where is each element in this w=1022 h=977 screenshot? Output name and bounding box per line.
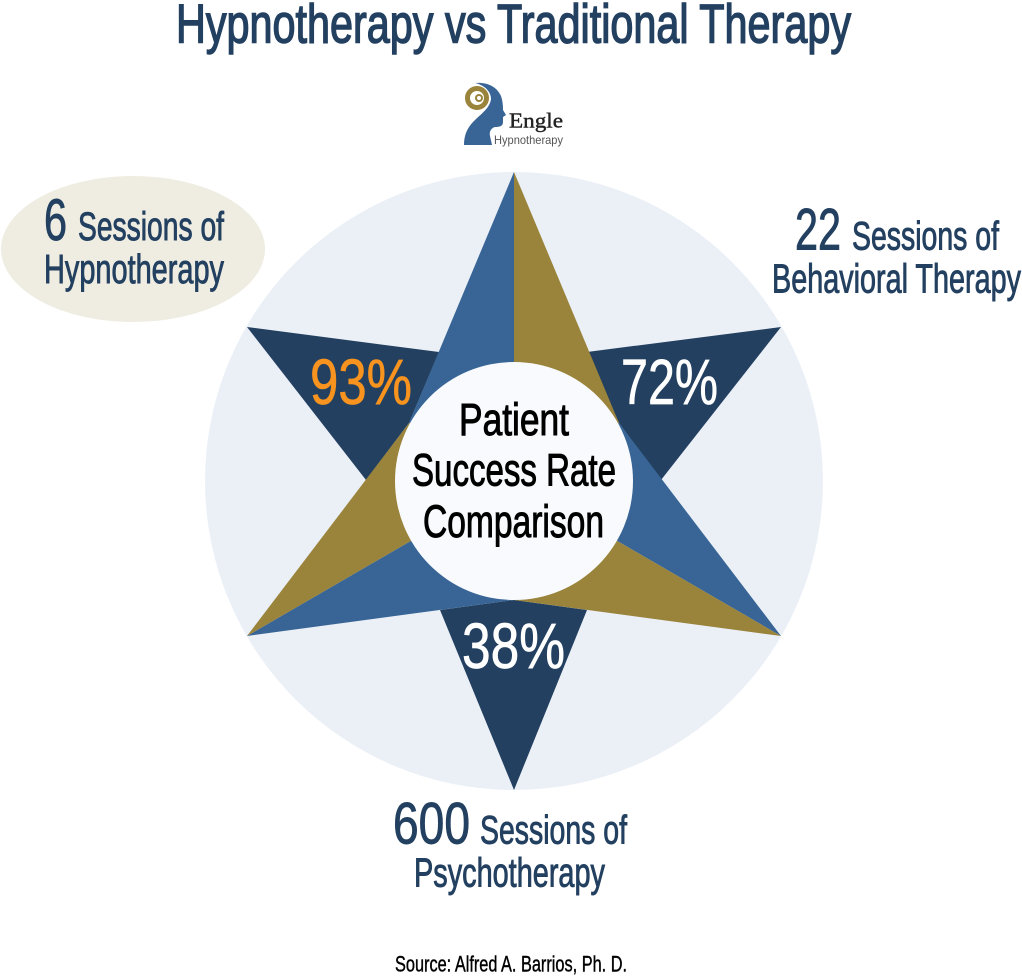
logo: Engle Hypnotherapy bbox=[464, 83, 563, 147]
stat: 93%: 93% bbox=[310, 346, 412, 418]
label: 22 sessions of behavioral therapy bbox=[772, 198, 1021, 302]
center label: Patient bbox=[459, 394, 569, 445]
six-pointed star bbox=[247, 172, 781, 790]
logo: Engle Hypnotherapy: Hypnotherapy bbox=[494, 133, 563, 147]
ellipse: hypnotherapy highlight bbox=[1, 176, 265, 322]
label: 6 sessions of hypnotherapy: Hypnotherapy bbox=[44, 246, 224, 292]
background circle bbox=[205, 172, 823, 790]
label: 600 sessions of psychotherapy: Psychotherapy bbox=[414, 850, 605, 896]
label: 600 sessions of psychotherapy: 600 bbox=[393, 792, 470, 856]
logo: Engle Hypnotherapy: Engle bbox=[509, 108, 563, 132]
label: 6 sessions of hypnotherapy bbox=[44, 188, 225, 292]
center circle bbox=[395, 362, 633, 600]
label: 6 sessions of hypnotherapy: Sessions of bbox=[78, 205, 225, 249]
center label: Comparison bbox=[423, 496, 604, 547]
stat: 72%: 72% bbox=[621, 346, 718, 418]
stat: 38%: 38% bbox=[462, 610, 565, 682]
label: 600 sessions of psychotherapy bbox=[393, 792, 628, 896]
center label: Success Rate bbox=[412, 444, 616, 496]
center label bbox=[412, 394, 616, 547]
label: 6 sessions of hypnotherapy: 6 bbox=[44, 188, 67, 253]
label: 22 sessions of behavioral therapy: 22 bbox=[795, 198, 841, 262]
source: Source: Alfred A. Barrios, Ph. D. bbox=[395, 952, 627, 976]
label: 600 sessions of psychotherapy: Sessions of bbox=[480, 808, 628, 852]
